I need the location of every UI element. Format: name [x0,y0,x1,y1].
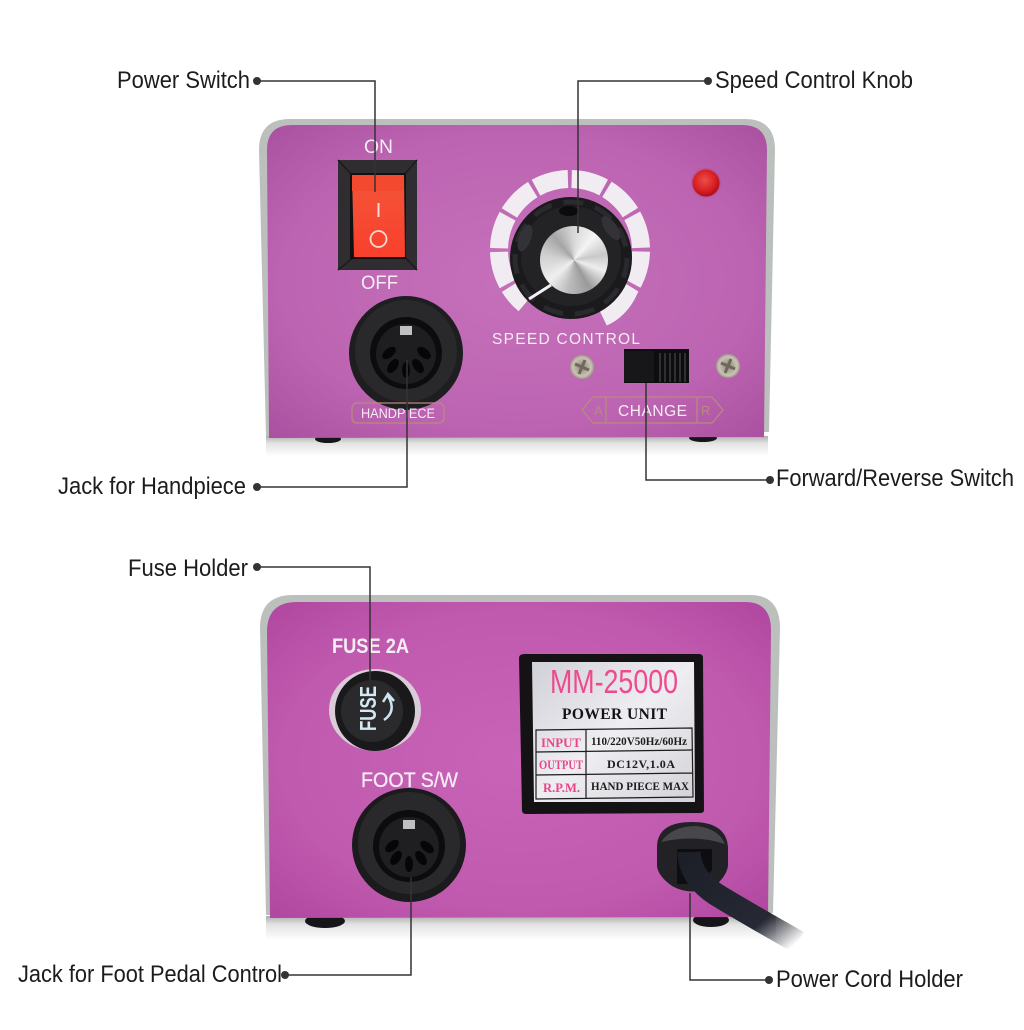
callout: Jack for Handpiece [58,360,407,500]
handpiece jack [349,296,463,410]
shadow [266,916,776,940]
FOOT S/W label: FOOT S/W [361,769,458,792]
spec table: 110/220V50Hz/60Hz [591,736,687,748]
feet [305,913,729,928]
model number: MM-25000 [550,663,678,700]
shadow [266,436,768,456]
FUSE 2A label: FUSE 2A [332,635,409,658]
power switch [338,160,417,270]
callout: Fuse Holder [128,555,370,680]
spec table: OUTPUT [539,758,584,772]
fuse holder: FUSE [355,686,381,731]
callout: Speed Control Knob [578,67,913,233]
feet [315,434,717,443]
spec table: INPUT [541,736,582,750]
spec table: DC12V,1.0A [607,757,675,771]
callout: Jack for Handpiece: Jack for Handpiece [58,473,246,500]
housing [259,119,775,436]
fuse holder [329,669,421,751]
front panel [267,125,767,438]
right screw [716,354,740,378]
callout: Jack for Foot Pedal Control: Jack for Foot Pedal Control [18,961,282,988]
callout: Power Cord Holder: Power Cord Holder [776,966,963,993]
callout: Forward/Reverse Switch [646,383,1014,492]
speed control knob [510,197,632,319]
spec table: HAND PIECE MAX [591,779,689,793]
power cord [657,822,798,942]
HANDPIECE label: HANDPIECE [361,406,435,421]
front unit [259,119,775,456]
housing [260,595,780,915]
foot pedal jack [352,788,466,902]
CHANGE label: R [701,403,710,418]
CHANGE label: A [594,403,603,418]
HANDPIECE label [352,403,444,423]
callout: Fuse Holder: Fuse Holder [128,555,248,582]
rear panel [267,602,771,918]
callout: Power Switch [117,67,375,192]
speed scale [470,150,670,350]
callout: Power Switch: Power Switch [117,67,250,94]
left screw [570,355,594,379]
ON label: ON [364,137,393,158]
SPEED CONTROL label: SPEED CONTROL [492,331,640,348]
CHANGE label [582,397,723,423]
forward/reverse slide switch [624,349,689,383]
spec table: R.P.M. [543,781,580,795]
POWER UNIT heading: POWER UNIT [562,706,668,723]
callout: Speed Control Knob: Speed Control Knob [715,67,913,94]
CHANGE label: CHANGE [618,403,687,420]
rating plate [519,654,704,814]
callout: Power Cord Holder [690,893,963,993]
indicator LED [691,168,721,198]
spec table [536,728,693,799]
callout: Jack for Foot Pedal Control [18,877,411,988]
rear unit [260,595,798,942]
OFF label: OFF [361,273,398,294]
